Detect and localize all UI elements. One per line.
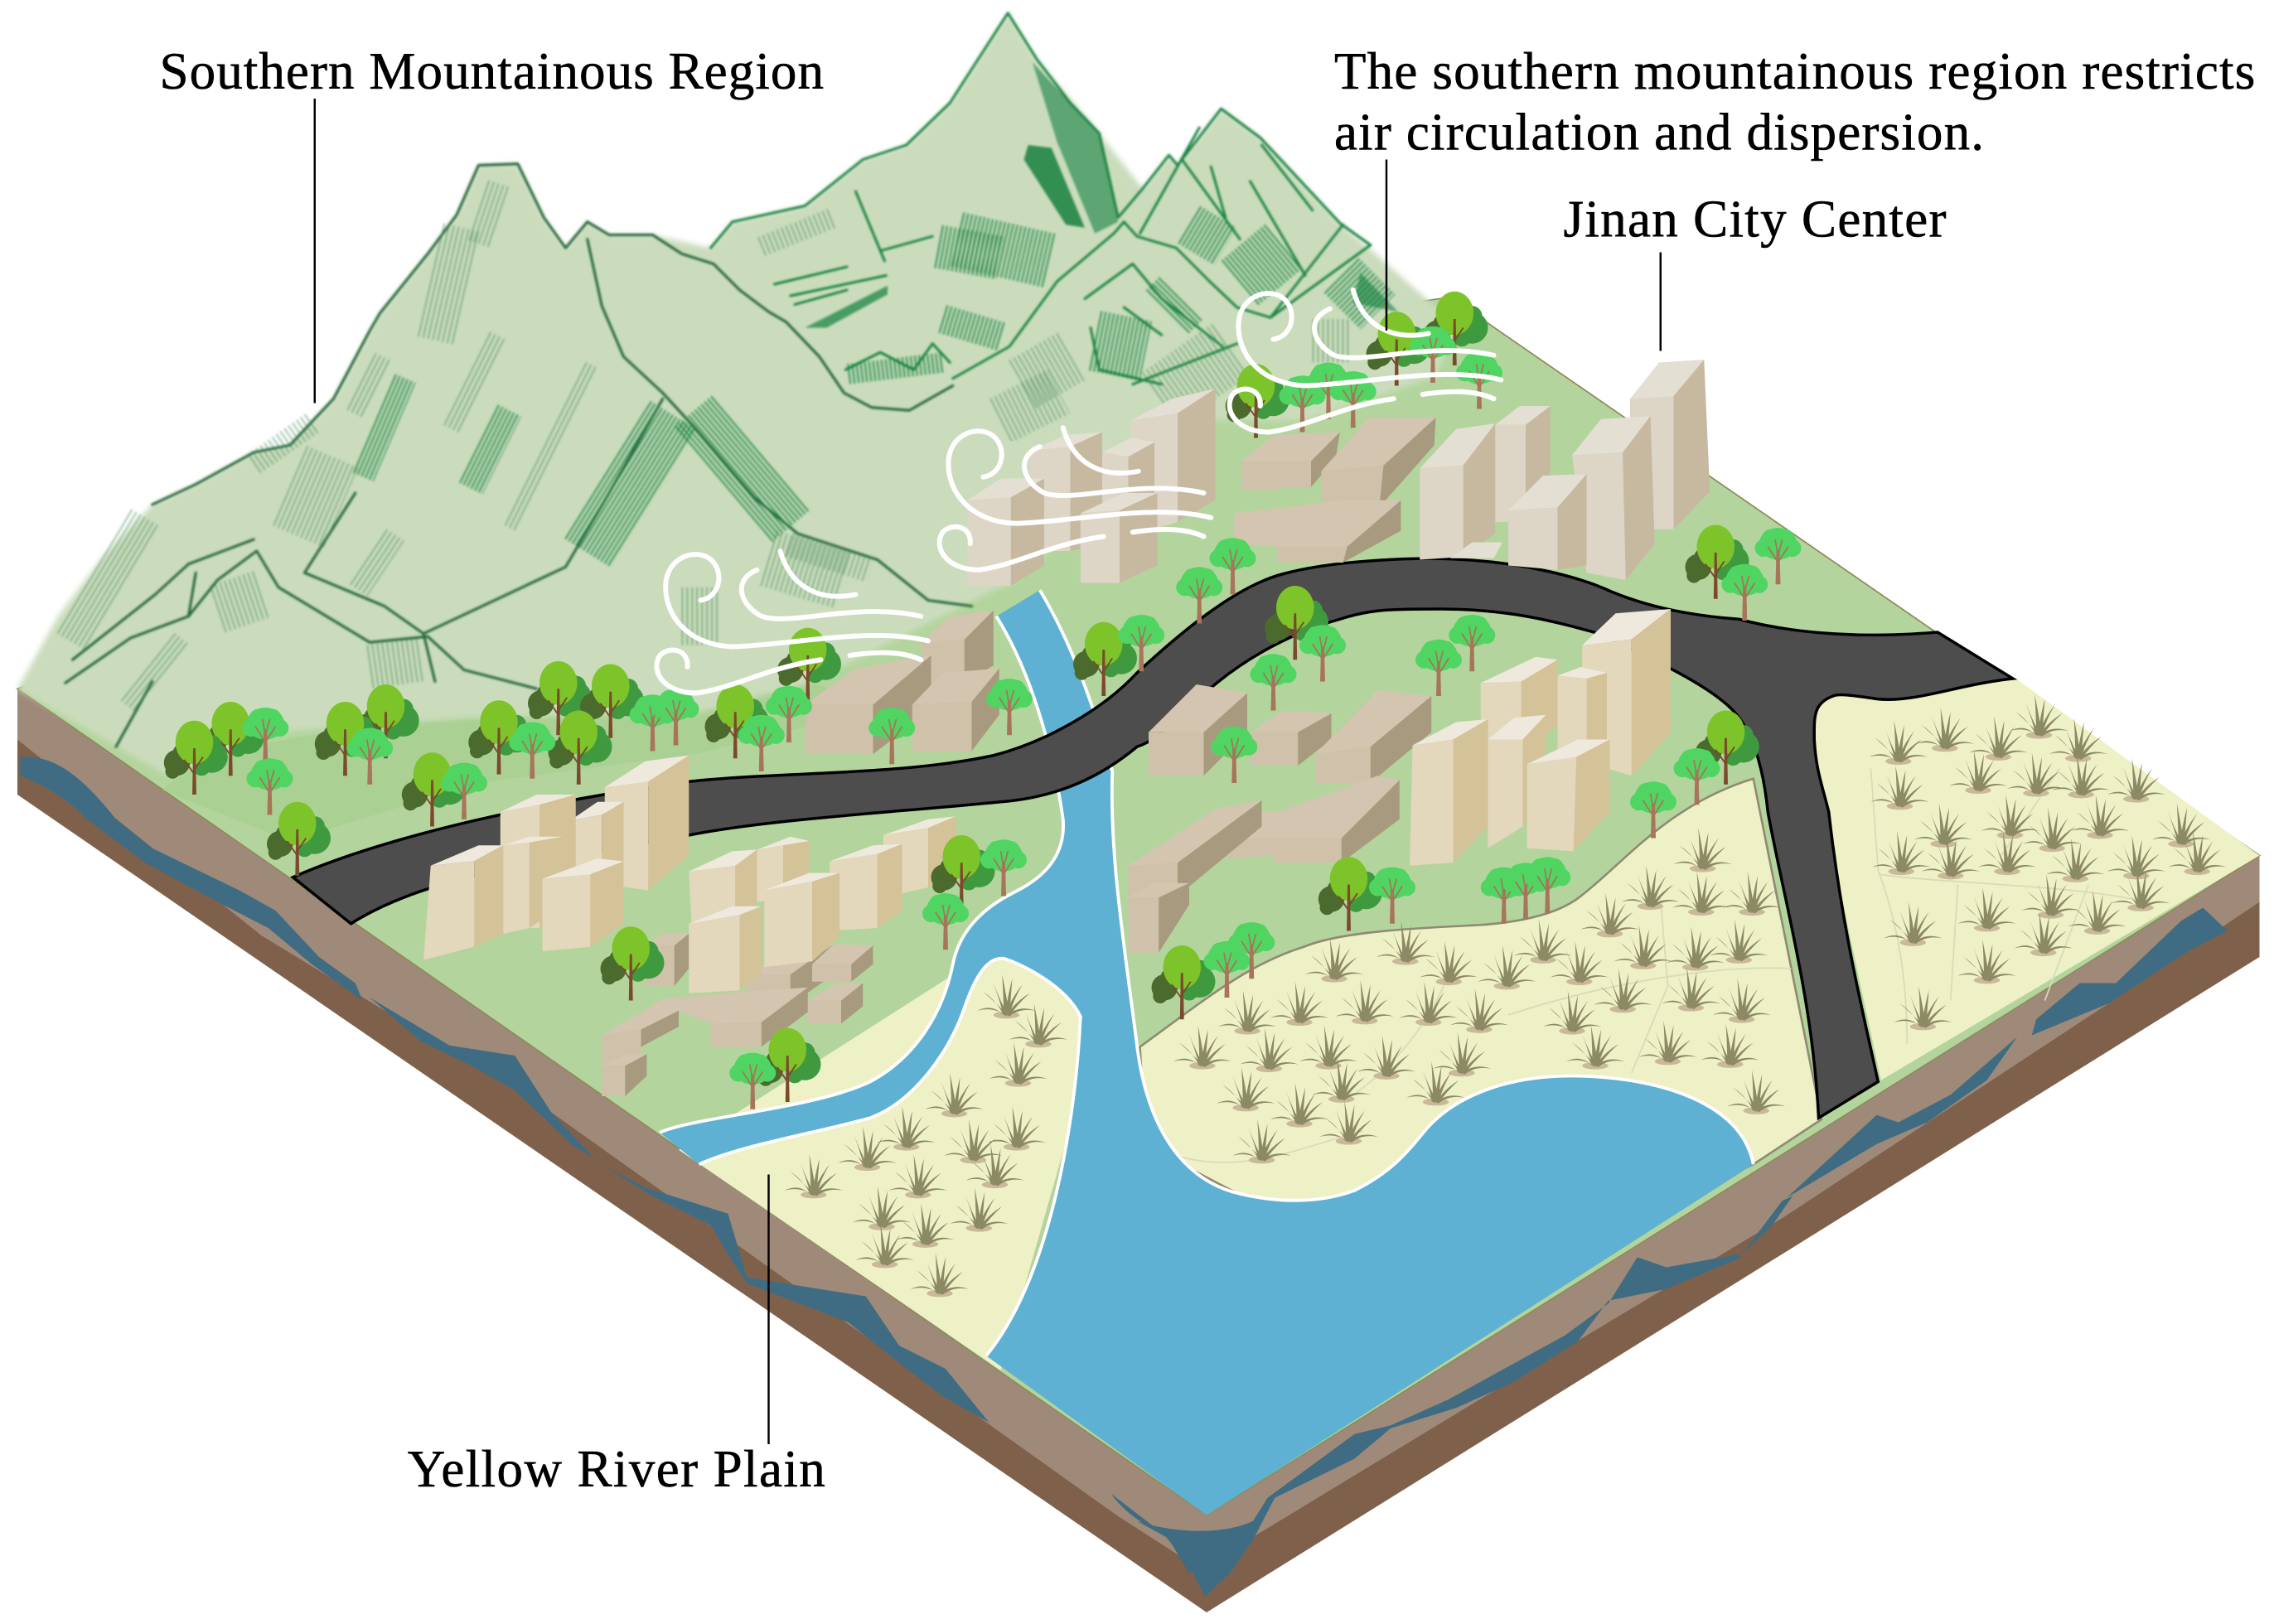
label: air circulation note: air circulation and dispersion. [1334, 103, 1984, 161]
label: Southern Mountainous Region: Southern Mountainous Region [160, 42, 824, 100]
plain: big central plain [1140, 779, 1822, 1305]
mountain ridges and hatching: back range [711, 13, 1398, 421]
block side: right face [1137, 855, 2259, 1612]
groundwater veins: right face [1137, 1254, 1742, 1597]
buildings: central south-bank low blocks [1129, 684, 1431, 953]
plain: far-right plain [1798, 679, 2259, 1080]
wind: upper gust [1230, 290, 1501, 433]
trees [164, 292, 1802, 1109]
label: air circulation note: The southern mountainous region restricts [1334, 42, 2255, 100]
label: air circulation note [1334, 42, 2255, 331]
plain field lines [1871, 769, 2131, 1044]
grass: central plain [1173, 828, 1785, 1163]
groundwater veins: left face [20, 756, 989, 1423]
road [293, 558, 2013, 1118]
plain field lines [1182, 899, 1791, 1162]
buildings: south-west towers [423, 756, 956, 993]
wind: lower gust [656, 551, 928, 693]
wind: middle gust [940, 428, 1211, 570]
buildings: city center cluster [1234, 360, 1710, 580]
label: Jinan City Center: Jinan City Center [1563, 190, 1947, 248]
label: Yellow River Plain: Yellow River Plain [408, 1440, 825, 1498]
buildings: south-west low blocks [602, 934, 873, 1096]
river [660, 590, 1754, 1515]
block side: left face [17, 689, 1233, 1612]
grass: far-right plain [1870, 694, 2226, 1030]
ground surface [17, 297, 2259, 1515]
grass: island plain [785, 974, 1067, 1297]
plain: river island plain [679, 943, 1102, 1370]
mountain ridges and hatching: front range [65, 164, 971, 747]
buildings: central south-bank towers [1410, 609, 1671, 866]
mountains [17, 13, 1458, 776]
buildings: low blocks by the river [805, 611, 999, 754]
darker meadow at mountain foot [162, 681, 870, 841]
river banks [660, 590, 1754, 1356]
buildings: back-left grey cluster [967, 389, 1215, 586]
